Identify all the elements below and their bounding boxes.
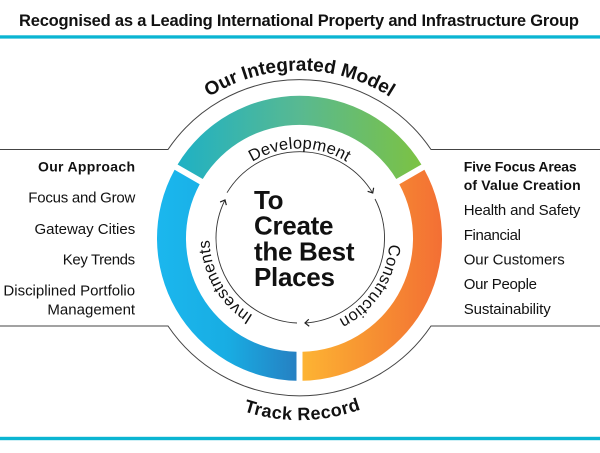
title: Recognised as a Leading International Property and Infrastructure Group <box>19 12 579 30</box>
ring label: Investments: Investments <box>200 240 252 324</box>
arrow: investments to development <box>216 200 297 323</box>
heading: five focus areas: Five Focus Areas <box>464 159 577 175</box>
focus areas list: Our People <box>464 276 537 293</box>
ring label: Development: Development <box>248 137 351 162</box>
focus areas list: Financial <box>464 227 521 244</box>
centre statement <box>254 185 355 292</box>
focus areas list: Health and Safety <box>464 202 581 219</box>
panel: our approach <box>3 159 136 318</box>
approach list: Gateway Cities <box>34 221 135 238</box>
ring label: Construction: Construction <box>340 246 400 326</box>
centre statement: To <box>254 185 283 215</box>
focus areas list <box>464 202 581 318</box>
ring segment: investments (blue) <box>157 170 296 381</box>
outer bracket: top <box>0 80 600 150</box>
focus areas list: Our Customers <box>464 251 565 268</box>
outer bracket: bottom <box>0 326 600 396</box>
approach list: Disciplined Portfolio <box>3 283 135 300</box>
panel: five focus areas <box>464 159 581 318</box>
centre statement: the Best <box>254 236 355 266</box>
approach list: Key Trends <box>63 251 135 268</box>
focus areas list: Sustainability <box>464 301 551 318</box>
heading: five focus areas <box>464 159 581 193</box>
ring segment: development (green) <box>178 96 421 179</box>
arrow: construction to investments <box>305 199 385 323</box>
curved heading: Our Integrated Model: Our Integrated Model <box>205 58 396 96</box>
ring segment: construction (orange) <box>302 170 442 381</box>
approach list <box>3 190 136 318</box>
bottom rule <box>0 437 600 440</box>
centre statement: Create <box>254 210 333 240</box>
centre statement: Places <box>254 262 335 292</box>
curved heading: Track Record: Track Record <box>246 398 360 420</box>
heading: our approach: Our Approach <box>38 159 135 175</box>
top rule <box>0 35 600 39</box>
approach list: Focus and Grow <box>28 190 135 207</box>
approach list: Management <box>47 301 136 318</box>
arrow: development to construction <box>227 152 373 193</box>
heading: five focus areas: of Value Creation <box>464 177 581 193</box>
